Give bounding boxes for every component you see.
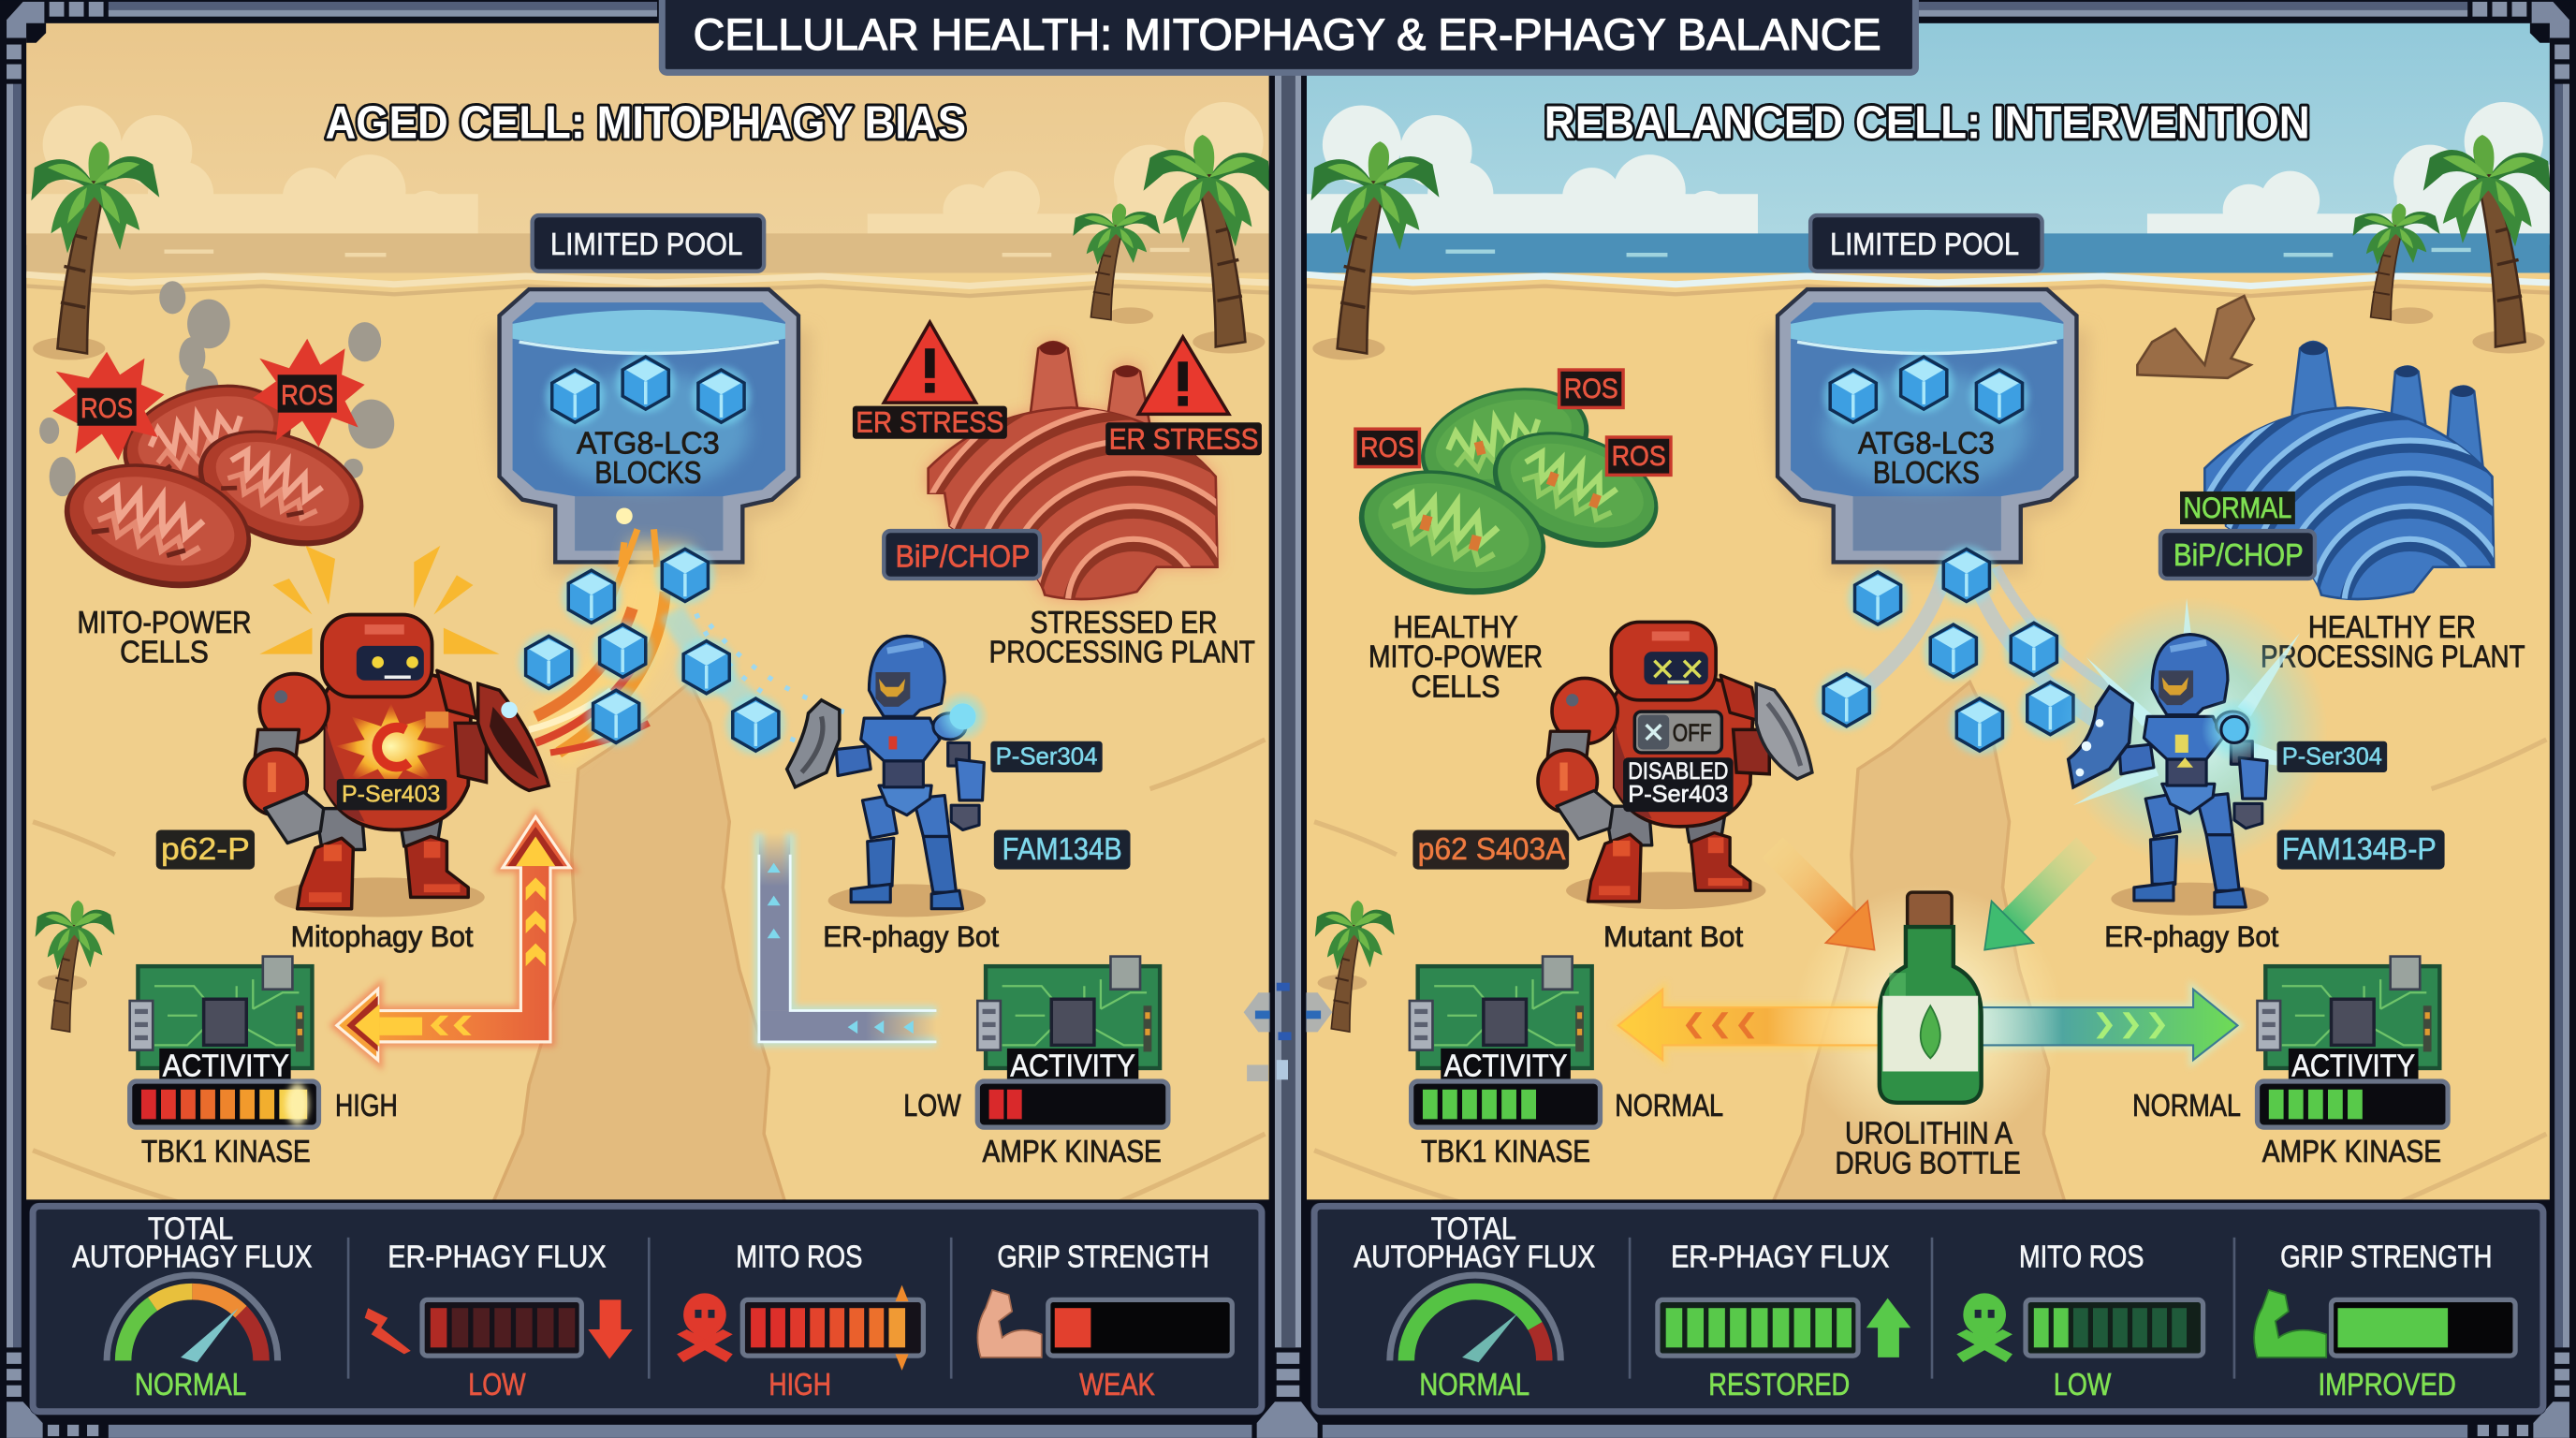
- metric: mito ROS: MITO ROS: [736, 1240, 862, 1274]
- label: TBK1 high: [141, 1089, 398, 1169]
- icon: activated ER-phagy bot: [2058, 596, 2333, 916]
- icon: ROS burst right: ROS: [281, 380, 333, 411]
- metric: mito ROS: [677, 1240, 923, 1402]
- icon: healthy ER: [2203, 341, 2496, 601]
- icon: ROS burst right: [253, 339, 365, 448]
- icon: warning triangles: [884, 322, 1229, 414]
- label: AMPK normal: [2132, 1089, 2441, 1169]
- label: p62-P: p62-P: [161, 832, 250, 867]
- metric: ER-phagy flux: ER-PHAGY FLUX: [388, 1240, 607, 1274]
- activity tag: ACTIVITY: [163, 1049, 289, 1084]
- icon: bottle glow: [1794, 884, 2063, 1153]
- title: CELLULAR HEALTH: MITOPHAGY & ER-PHAGY BALANCE: [694, 10, 1881, 60]
- title: [662, 0, 1915, 72]
- metric: grip strength: IMPROVED: [2318, 1368, 2456, 1402]
- label: P-Ser304: P-Ser304: [996, 743, 1097, 770]
- label: TBK1 high: HIGH: [335, 1089, 398, 1123]
- icon: flame flux stream: [529, 507, 666, 753]
- metric: ER-phagy flux: [1658, 1240, 1910, 1402]
- activity tag: ACTIVITY: [1444, 1049, 1567, 1084]
- gauge: AMPK low: [977, 1081, 1168, 1127]
- label: AMPK normal: NORMAL: [2132, 1089, 2241, 1123]
- OFF switch: OFF: [1673, 719, 1712, 747]
- label: limited pool: LIMITED POOL: [1830, 227, 2019, 262]
- label: bot names right: [1603, 919, 2279, 953]
- metric: grip strength: [977, 1240, 1232, 1402]
- icon: AMPK circuit: [2258, 957, 2439, 1084]
- label: healthy ER processing plant: HEALTHY ER: [2308, 610, 2476, 645]
- label: TBK1 high: TBK1 KINASE: [141, 1135, 311, 1169]
- metric: total autophagy flux: NORMAL: [1419, 1368, 1530, 1402]
- gauge: TBK1 high: [130, 1081, 318, 1127]
- icon: ATG8-LC3 tank: [1764, 289, 2089, 575]
- label: bot names right: ER-phagy Bot: [2104, 919, 2279, 953]
- icon: ER-phagy bot: [787, 636, 989, 917]
- label: FAM134B: FAM134B: [1003, 832, 1122, 867]
- label: healthy ER processing plant: [2261, 610, 2525, 675]
- icon: ROS burst left: [52, 352, 165, 461]
- icon: smoke: [39, 281, 394, 496]
- label: Urolithin A drug bottle: UROLITHIN A: [1845, 1117, 2013, 1152]
- metric: grip strength: [2254, 1240, 2515, 1402]
- label: healthy mito-power cells: MITO-POWER: [1368, 640, 1543, 675]
- label: TBK1 normal: NORMAL: [1615, 1089, 1723, 1123]
- label: low ROS tags: ROS: [1612, 441, 1666, 472]
- metric: ER-phagy flux: LOW: [468, 1368, 526, 1402]
- label: bot names left: [291, 919, 999, 953]
- label: stressed ER processing plant: PROCESSING PLANT: [989, 635, 1255, 669]
- icon: ROS burst left: ROS: [80, 393, 133, 424]
- activity tag: ACTIVITY: [2291, 1049, 2415, 1084]
- metric: ER-phagy flux: ER-PHAGY FLUX: [1671, 1240, 1889, 1274]
- label: limited pool: [1810, 215, 2042, 271]
- icon: blue particle stream: [672, 594, 855, 748]
- tank label: [577, 427, 720, 491]
- metric: ER-phagy flux: [365, 1240, 633, 1402]
- label: healthy mito-power cells: CELLS: [1412, 669, 1500, 704]
- panel: rebalanced cell metrics: [1311, 1203, 2546, 1415]
- label: p62 S403A: p62 S403A: [1418, 832, 1566, 867]
- label: mito-power cells: CELLS: [120, 635, 209, 669]
- label: AMPK low: [903, 1089, 1162, 1169]
- label: AMPK low: AMPK KINASE: [983, 1135, 1162, 1169]
- arrow: to AMPK: [1969, 990, 2237, 1060]
- label: bot names left: ER-phagy Bot: [823, 919, 999, 953]
- activity tag: ACTIVITY: [1010, 1049, 1135, 1084]
- icon: cube stream right: [1823, 567, 2128, 731]
- icon: palm trees right scene: [1311, 135, 2552, 1032]
- tank label: ATG8-LC3: [1858, 427, 1995, 462]
- sky and beach left: [26, 23, 1270, 1203]
- label: BiP/CHOP: [884, 531, 1040, 579]
- tank label: [1858, 427, 1995, 491]
- metric: total autophagy flux: AUTOPHAGY FLUX: [72, 1240, 312, 1274]
- metric: grip strength: WEAK: [1079, 1368, 1155, 1402]
- label: AMPK normal: AMPK KINASE: [2262, 1135, 2441, 1169]
- metric: mito ROS: [1956, 1240, 2203, 1402]
- icon: TBK1 circuit: [1410, 957, 1592, 1084]
- icon: driftwood rock: [2137, 296, 2254, 378]
- label: normal tag: NORMAL: [2184, 491, 2291, 524]
- label: BiP/CHOP: BiP/CHOP: [2174, 538, 2304, 573]
- icon: ATG8-LC3 tank: [487, 289, 812, 575]
- label: FAM134B-P: FAM134B-P: [2282, 832, 2437, 867]
- icon: flowing cubes right: [1817, 546, 2080, 755]
- visor X eyes: [1654, 661, 1701, 683]
- icon: divider sparkle: [1244, 983, 1332, 1081]
- label: BiP/CHOP: BiP/CHOP: [896, 540, 1030, 575]
- label: healthy mito-power cells: HEALTHY: [1393, 610, 1518, 645]
- icon: mutant bot: [1538, 622, 1812, 909]
- icon: flowing cubes left: [520, 546, 785, 755]
- gauge: AMPK normal: [2258, 1081, 2448, 1127]
- label: healthy mito-power cells: [1368, 610, 1543, 704]
- arrow: weak AMPK signal: [759, 833, 936, 1042]
- tank label: ATG8-LC3: [577, 427, 720, 462]
- sky and beach right: [1306, 23, 2550, 1203]
- metric: total autophagy flux: [72, 1211, 312, 1402]
- label: P-Ser304: P-Ser304: [2282, 743, 2382, 770]
- metric: grip strength: GRIP STRENGTH: [997, 1240, 1209, 1274]
- label: low ROS tags: [1355, 370, 1671, 475]
- icon: mitophagy bot: [245, 546, 549, 917]
- cubes in tank: [546, 353, 751, 426]
- icon: palm trees left scene: [31, 135, 1271, 1032]
- disabled tag: [1623, 757, 1734, 812]
- heading: left panel: AGED CELL: MITOPHAGY BIAS: [326, 98, 966, 149]
- metric: total autophagy flux: NORMAL: [135, 1368, 246, 1402]
- panel: rebalanced cell scene: [1306, 23, 2576, 1203]
- metric: mito ROS: HIGH: [768, 1368, 831, 1402]
- label: mito-power cells: MITO-POWER: [77, 606, 252, 640]
- OFF switch: [1634, 712, 1721, 753]
- gauge: TBK1 normal: [1412, 1081, 1600, 1127]
- metric: total autophagy flux: AUTOPHAGY FLUX: [1354, 1240, 1595, 1274]
- cubes in tank: [1823, 353, 2029, 426]
- panel: aged cell scene: [26, 23, 1364, 1203]
- disabled tag: DISABLED: [1628, 759, 1728, 785]
- label: low ROS tags: ROS: [1360, 433, 1414, 463]
- arrow: diagonal to bottle from mutant bot: [1751, 827, 1895, 971]
- icon: stressed ER: [920, 335, 1225, 607]
- energy rays: [259, 546, 500, 654]
- metric: ER-phagy flux: RESTORED: [1708, 1368, 1850, 1402]
- disabled tag: P-Ser403: [1628, 783, 1728, 808]
- arrow: strong TBK1 signal: [337, 816, 570, 1060]
- label: Urolithin A drug bottle: DRUG BOTTLE: [1835, 1146, 2021, 1181]
- metric: total autophagy flux: TOTAL: [1431, 1211, 1516, 1246]
- label: ER stress tags: ER STRESS: [856, 405, 1003, 439]
- arrow: diagonal to bottle from ER bot: [1964, 827, 2108, 971]
- label: ER stress tags: ER STRESS: [1109, 421, 1258, 455]
- label: bot names left: Mitophagy Bot: [291, 919, 474, 953]
- heading: right panel: REBALANCED CELL: INTERVENTION: [1544, 98, 2310, 149]
- metric: total autophagy flux: TOTAL: [148, 1211, 233, 1246]
- label: low ROS tags: ROS: [1564, 374, 1618, 404]
- icon: damaged mitochondria: [51, 367, 380, 608]
- panel: aged cell metrics: [30, 1203, 1265, 1415]
- label: BiP/CHOP: [2160, 531, 2315, 579]
- label: ER stress tags: [853, 405, 1262, 455]
- icon: AMPK circuit: [977, 957, 1160, 1084]
- P-Ser403 tag: P-Ser403: [342, 783, 440, 808]
- metric: mito ROS: LOW: [2054, 1368, 2112, 1402]
- icon: healthy mitochondria: [1345, 370, 1675, 614]
- label: limited pool: LIMITED POOL: [550, 227, 742, 262]
- metric: mito ROS: MITO ROS: [2019, 1240, 2144, 1274]
- icon: Urolithin A bottle: [1880, 892, 1982, 1103]
- arrow: to TBK1: [1618, 990, 1889, 1060]
- label: stressed ER processing plant: [989, 606, 1255, 669]
- label: bot names right: Mutant Bot: [1603, 919, 1743, 953]
- label: stressed ER processing plant: STRESSED ER: [1030, 606, 1218, 640]
- label: AMPK low: LOW: [903, 1089, 961, 1123]
- metric: grip strength: GRIP STRENGTH: [2280, 1240, 2492, 1274]
- label: healthy ER processing plant: PROCESSING PLANT: [2261, 640, 2525, 675]
- label: limited pool: [533, 215, 764, 271]
- label: Urolithin A drug bottle: [1835, 1117, 2021, 1181]
- label: TBK1 normal: TBK1 KINASE: [1421, 1135, 1590, 1169]
- chest glow: [335, 703, 446, 789]
- tank label: BLOCKS: [1873, 456, 1980, 491]
- label: mito-power cells: [77, 606, 252, 669]
- label: TBK1 normal: [1421, 1089, 1723, 1169]
- icon: TBK1 circuit: [130, 957, 312, 1084]
- metric: total autophagy flux: [1354, 1211, 1595, 1402]
- tank label: BLOCKS: [594, 456, 701, 491]
